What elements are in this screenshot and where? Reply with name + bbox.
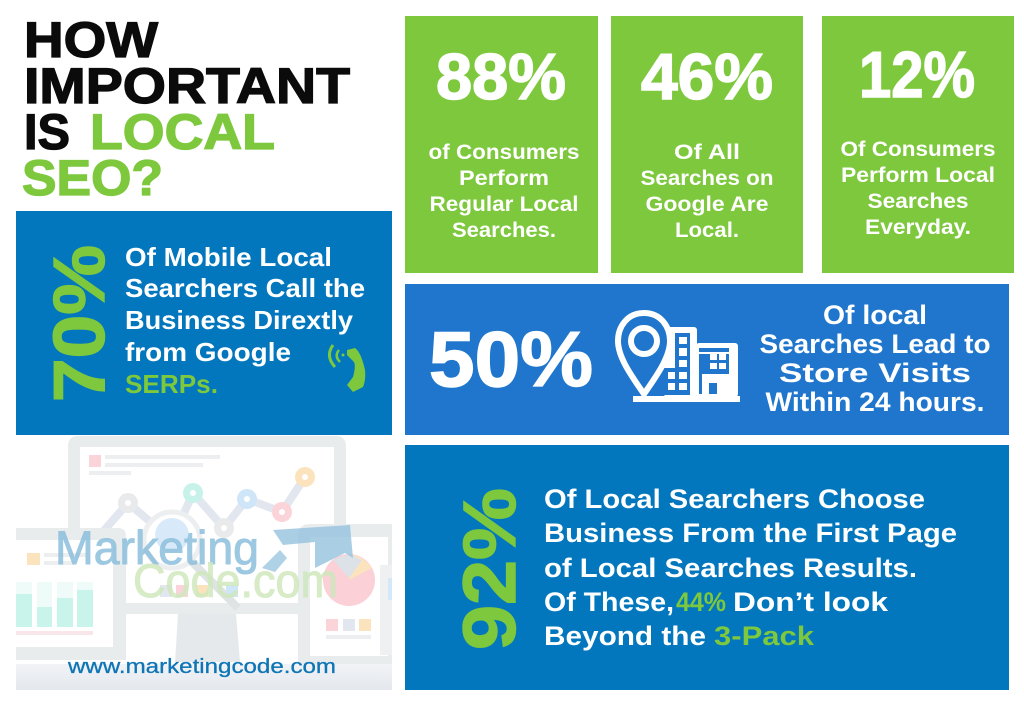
- panel: 88% stat: Searches.: [452, 219, 556, 242]
- panel: 12% stat: Perform Local: [841, 164, 995, 187]
- panel: 92% stat: of Local Searches Results.: [544, 553, 917, 583]
- title: [22, 12, 350, 206]
- panel: 92% stat: 3-Pack: [714, 621, 815, 651]
- icon: phone: [329, 345, 365, 392]
- panel: 92% stat: 44%: [676, 587, 726, 617]
- panel: 92% stat: Business From the First Page: [544, 518, 957, 548]
- rotated 70%: 70%: [40, 245, 120, 402]
- panel: 50% stat: Of local: [823, 300, 927, 330]
- website url: www.marketingcode.com: [67, 656, 336, 678]
- logo: marketing code: Marketing: [55, 521, 259, 574]
- panel: 88% stat: Perform: [459, 167, 549, 190]
- panel: 92% stat: Beyond the: [544, 621, 706, 651]
- panel: 70% stat: Searchers Call the: [125, 273, 365, 303]
- title: HOW: [24, 12, 159, 68]
- panel: 92% stat: Don’t look: [733, 587, 889, 617]
- title: LOCAL: [90, 104, 275, 160]
- title: IMPORTANT: [24, 58, 350, 114]
- panel: 88% stat: of Consumers: [428, 141, 580, 164]
- panel: 88% stat: 88%: [436, 40, 566, 113]
- rotated 92%: 92%: [448, 488, 531, 650]
- logo: marketing code: [55, 521, 353, 607]
- panel: 50% stat: [405, 284, 1009, 435]
- panel: 70% stat: Of Mobile Local: [125, 242, 332, 272]
- panel: 46% stat: Of All: [674, 141, 740, 164]
- panel: 88% stat: [405, 16, 598, 273]
- logo: marketing code: Code.com: [133, 554, 338, 607]
- panel: 12% stat: 12%: [859, 38, 975, 111]
- illustration: tablet: [298, 524, 392, 664]
- panel: 12% stat: [822, 16, 1014, 273]
- panel: 46% stat: Local.: [675, 219, 739, 242]
- panel: 92% stat: Of These,: [544, 587, 674, 617]
- panel: 92% stat: Of Local Searchers Choose: [544, 484, 925, 514]
- panel: 70% stat: from Google: [125, 337, 291, 367]
- panel: 12% stat: Everyday.: [865, 216, 971, 239]
- panel: 50% stat: Within 24 hours.: [766, 387, 984, 417]
- panel: 12% stat: Searches: [868, 190, 968, 213]
- panel: 70% stat: SERPs.: [125, 369, 218, 399]
- illustration: desk: [16, 664, 392, 690]
- panel: 88% stat: Regular Local: [430, 193, 578, 216]
- panel: 46% stat: Google Are: [646, 193, 768, 216]
- panel: 50% stat: Searches Lead to: [760, 329, 990, 359]
- panel: 46% stat: [611, 16, 803, 273]
- panel: marketing code image: [16, 436, 392, 690]
- title: IS: [24, 104, 70, 160]
- title: SEO?: [22, 150, 163, 206]
- icon: map pin with buildings: [618, 313, 740, 402]
- illustration: laptop: [16, 528, 126, 660]
- panel: 70% stat: Business Dirextly: [125, 305, 354, 335]
- panel: 46% stat: 46%: [641, 40, 773, 113]
- panel: 92% stat: [405, 445, 1009, 690]
- panel: 50% stat: 50%: [429, 315, 593, 403]
- panel: 70% stat: [16, 211, 392, 435]
- panel: 46% stat: Searches on: [640, 167, 774, 190]
- panel: 12% stat: Of Consumers: [840, 138, 996, 161]
- illustration: desktop monitor: [68, 436, 346, 662]
- panel: 50% stat: Store Visits: [779, 358, 971, 388]
